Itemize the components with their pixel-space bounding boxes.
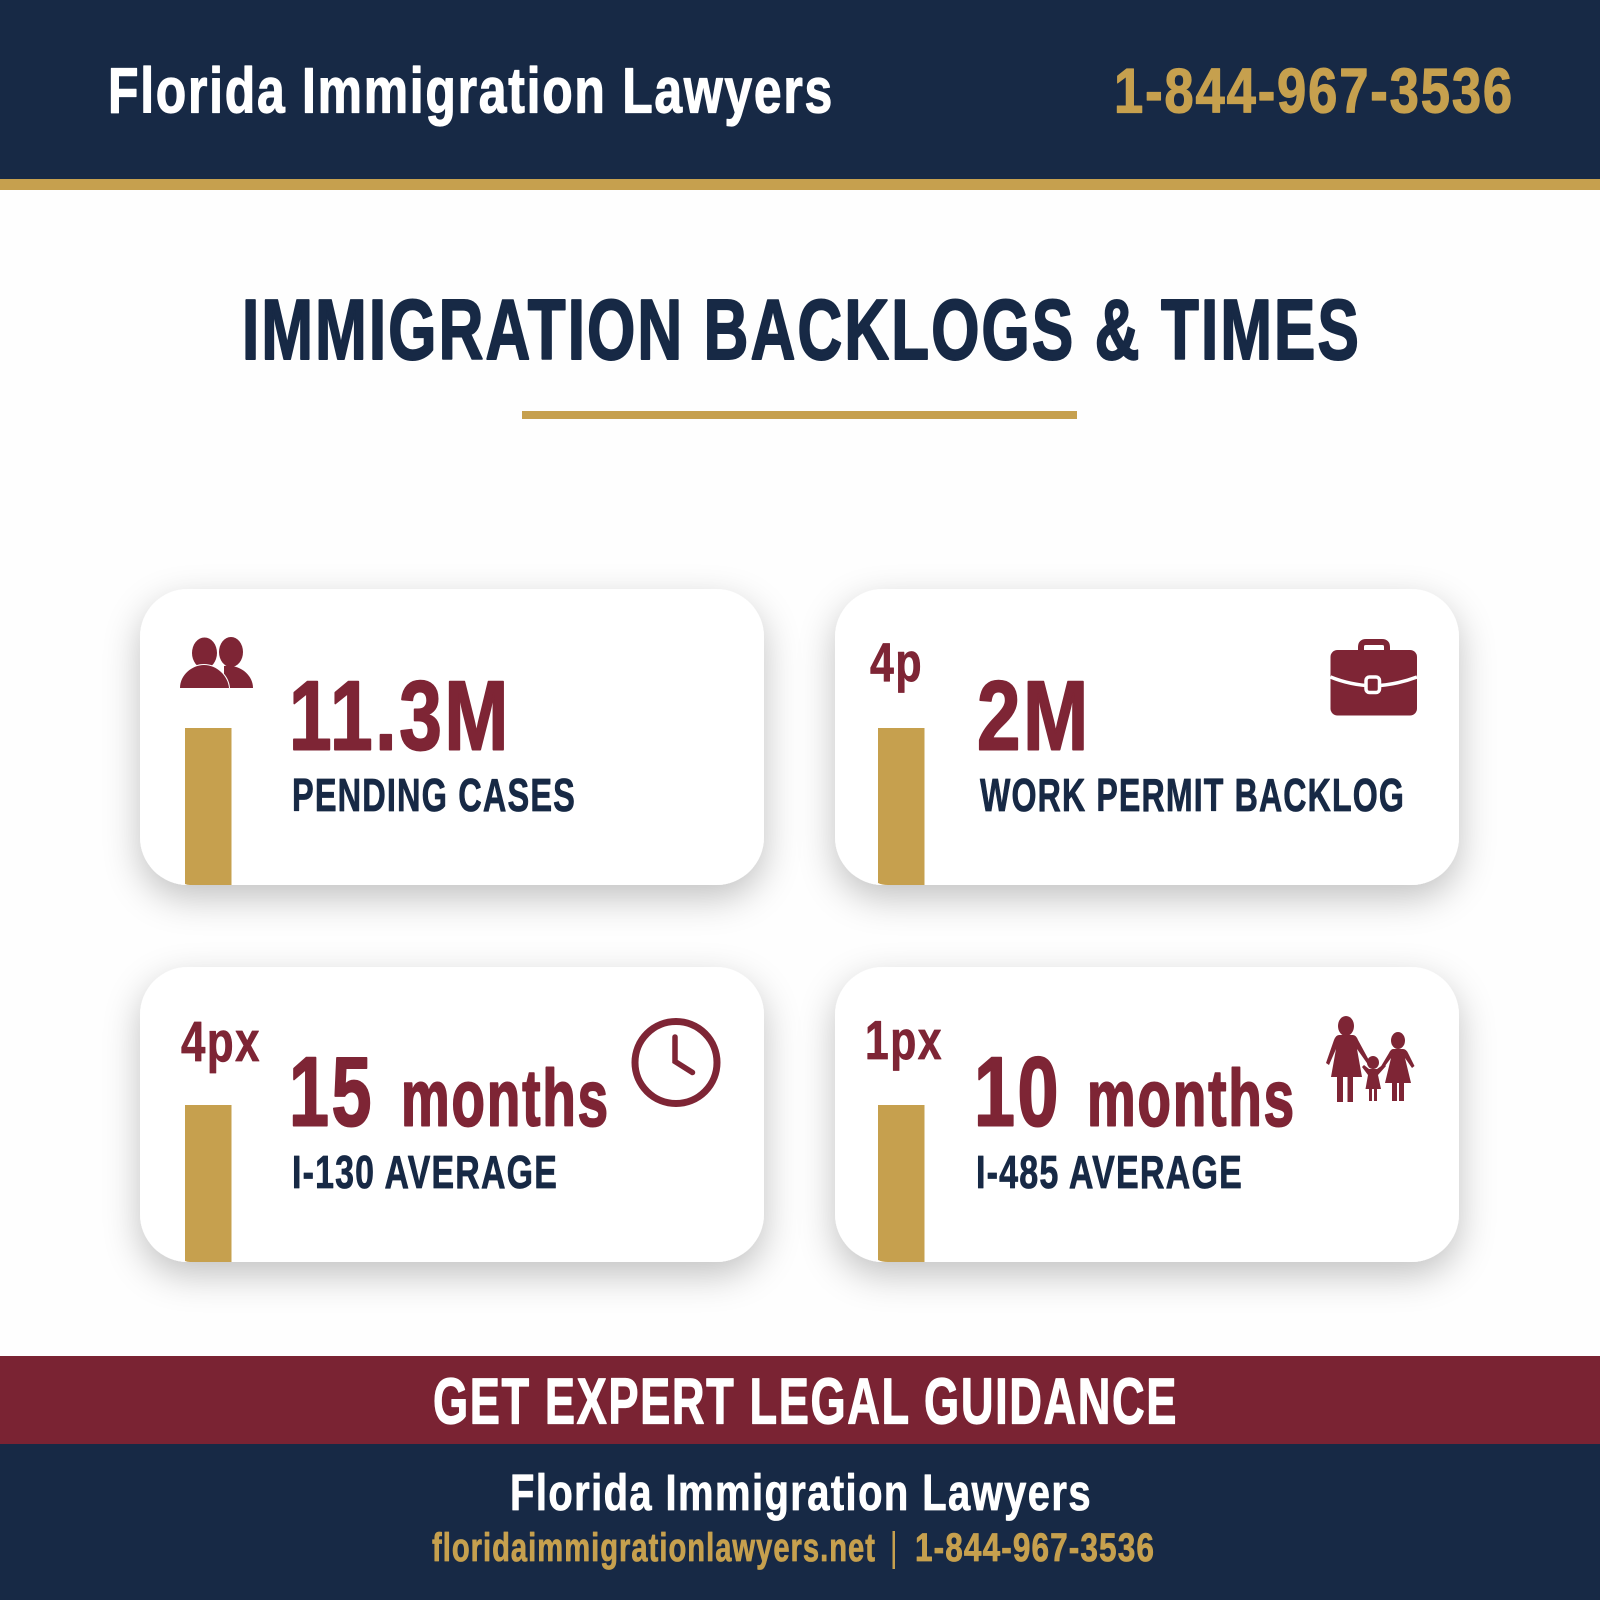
footer band [0,1444,1600,1600]
gold bar [878,728,924,885]
gold bar [185,728,232,885]
footer website: floridaimmigrationlawyers.net [432,1526,876,1570]
footer firm name: Florida Immigration Lawyers [510,1464,1092,1521]
panel: I-130 average [140,967,764,1262]
stat label: WORK PERMIT BACKLOG [980,769,1405,821]
panel: work permit backlog [835,589,1459,885]
header firm name: Florida Immigration Lawyers [108,54,834,126]
title underline [522,411,1077,419]
gold bar [878,1105,924,1262]
stat value: 2M [977,660,1091,770]
icon: clock [635,1022,717,1104]
stat unit: months [401,1054,610,1142]
header phone number: 1-844-967-3536 [1114,56,1514,126]
call to action band [0,1356,1600,1444]
header band [0,0,1600,190]
panel: pending cases [140,589,764,885]
stat value: 10 [974,1036,1061,1146]
call to action text: GET EXPERT LEGAL GUIDANCE [433,1364,1178,1438]
stat value: 11.3M [289,660,511,770]
icon: family [1326,1016,1414,1102]
stat value: 15 [289,1036,374,1146]
footer separator [892,1531,895,1569]
stat unit: months [1087,1054,1296,1142]
gold bar [185,1105,232,1262]
stat label: I-130 AVERAGE [292,1146,558,1198]
stat label: I-485 AVERAGE [976,1146,1243,1198]
stray label: 1px [865,1009,943,1071]
footer phone number: 1-844-967-3536 [915,1526,1155,1570]
stat label: PENDING CASES [292,769,576,821]
stray label: 4px [181,1010,261,1074]
stray label: 4p [870,631,923,693]
icon: people [179,637,255,691]
icon: briefcase [1330,642,1417,716]
panel: I-485 average [835,967,1459,1262]
